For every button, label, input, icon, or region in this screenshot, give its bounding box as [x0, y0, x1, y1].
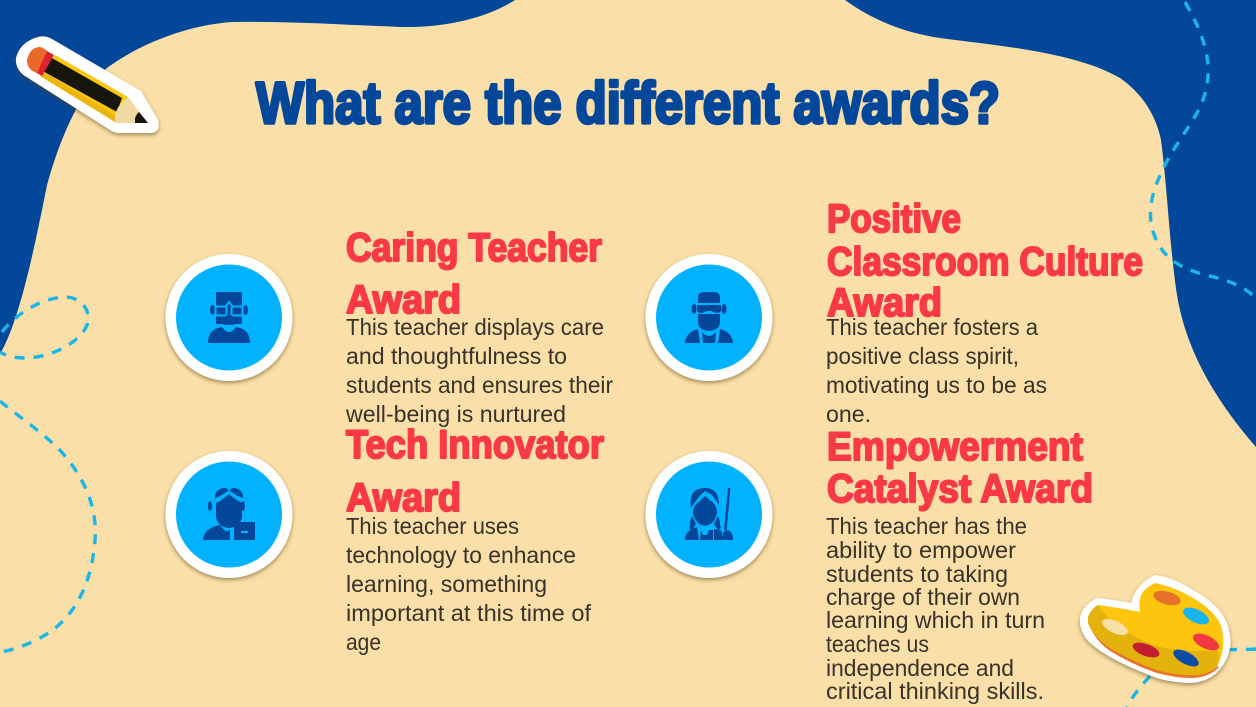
description: tech innovator: age	[346, 629, 381, 655]
description: empowerment catalyst	[826, 513, 1045, 704]
description: caring teacher: and thoughtfulness to	[346, 343, 567, 369]
description: empowerment catalyst: learning which in turn	[826, 607, 1045, 633]
heading: positive classroom culture award	[827, 197, 1143, 325]
panel: positive classroom culture award	[646, 197, 1143, 427]
icon: teacher with goggles	[646, 254, 772, 381]
heading: caring teacher award	[346, 226, 602, 322]
heading: positive classroom culture award: Award	[827, 281, 942, 325]
description: positive classroom culture: one.	[826, 401, 871, 427]
icon: pencil sticker	[16, 36, 159, 133]
dashed path: top right	[1150, 2, 1256, 298]
dashed path: under palette	[1127, 676, 1150, 707]
description: tech innovator	[346, 513, 592, 655]
heading: tech innovator award: Tech Innovator	[346, 423, 604, 467]
heading: positive classroom culture award: Classroom Culture	[827, 240, 1143, 284]
description: empowerment catalyst: This teacher has the	[826, 513, 1027, 539]
dashed path: left loop	[0, 297, 88, 358]
panel: tech innovator award	[166, 423, 604, 655]
panel: caring teacher award	[166, 226, 613, 427]
heading: tech innovator award	[346, 423, 604, 520]
heading: caring teacher award: Caring Teacher	[346, 226, 602, 270]
heading: caring teacher award: Award	[346, 278, 461, 322]
dashed path: left curve	[0, 401, 95, 652]
description: empowerment catalyst: students to taking	[826, 561, 1008, 587]
title: What are the different awards?	[256, 71, 1000, 136]
icon: paint palette sticker	[1080, 575, 1231, 683]
heading: empowerment catalyst award: Empowerment	[827, 425, 1083, 469]
description: empowerment catalyst: teaches us	[826, 631, 929, 657]
heading: tech innovator award: Award	[346, 476, 461, 520]
description: tech innovator: This teacher uses	[346, 513, 519, 539]
icon: teacher with laptop	[166, 451, 292, 578]
description: empowerment catalyst: critical thinking skills.	[826, 678, 1044, 704]
icon: teacher with glasses	[166, 254, 292, 381]
description: empowerment catalyst: independence and	[826, 655, 1014, 681]
description: tech innovator: technology to enhance	[346, 542, 576, 568]
description: tech innovator: important at this time of	[346, 600, 592, 626]
heading: positive classroom culture award: Positive	[827, 197, 961, 241]
description: positive classroom culture	[826, 314, 1047, 427]
heading: empowerment catalyst award: Catalyst Award	[827, 467, 1093, 511]
description: caring teacher: students and ensures their	[346, 372, 613, 398]
dashed path: bottom right	[1225, 649, 1256, 650]
description: caring teacher	[345, 314, 613, 427]
description: empowerment catalyst: ability to empower	[826, 537, 1016, 563]
description: positive classroom culture: This teacher fosters a	[826, 314, 1038, 340]
description: positive classroom culture: positive class spirit,	[826, 343, 1019, 369]
panel: empowerment catalyst award	[646, 425, 1093, 704]
description: positive classroom culture: motivating us to be as	[826, 372, 1047, 398]
description: empowerment catalyst: charge of their own	[826, 584, 1020, 610]
description: caring teacher: well-being is nurtured	[345, 401, 566, 427]
description: tech innovator: learning, something	[346, 571, 547, 597]
description: caring teacher: This teacher displays care	[346, 314, 604, 340]
heading: empowerment catalyst award	[827, 425, 1093, 511]
icon: teacher with pointer	[646, 451, 772, 578]
